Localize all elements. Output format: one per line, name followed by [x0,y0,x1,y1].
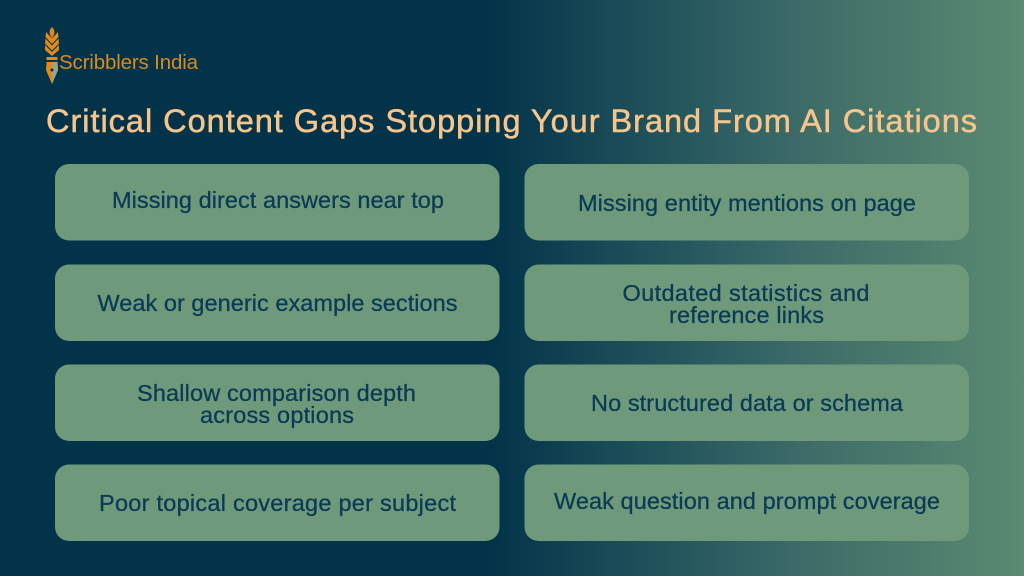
card: weak example sections: Weak or generic example sections [98,290,458,316]
card: missing entity mentions: Missing entity mentions on page [578,190,916,216]
card: shallow comparison depth: across options [200,402,354,428]
card: poor topical coverage: Poor topical coverage per subject [99,490,456,516]
card: weak question coverage [524,464,969,541]
card: weak example sections [55,264,500,341]
card: missing direct answers: Missing direct answers near top [112,187,444,213]
title: Critical Content Gaps Stopping Your Brand From AI Citations [46,103,977,139]
card: poor topical coverage [55,464,500,541]
icon: wheat and pen nib [45,27,59,84]
logo: Scribblers India [45,27,199,84]
logo wordmark: Scribblers India [59,51,199,74]
card: outdated statistics: reference links [669,302,824,328]
card: missing entity mentions [524,164,969,240]
card: outdated statistics: Outdated statistics and [622,280,870,306]
card: weak question coverage: Weak question and prompt coverage [554,488,940,514]
card: shallow comparison depth [55,364,500,441]
card: missing direct answers [55,164,500,240]
card: no structured data: No structured data or schema [591,390,904,416]
card: shallow comparison depth: Shallow comparison depth [137,380,416,406]
card: no structured data [524,364,969,441]
card: outdated statistics [524,264,969,341]
